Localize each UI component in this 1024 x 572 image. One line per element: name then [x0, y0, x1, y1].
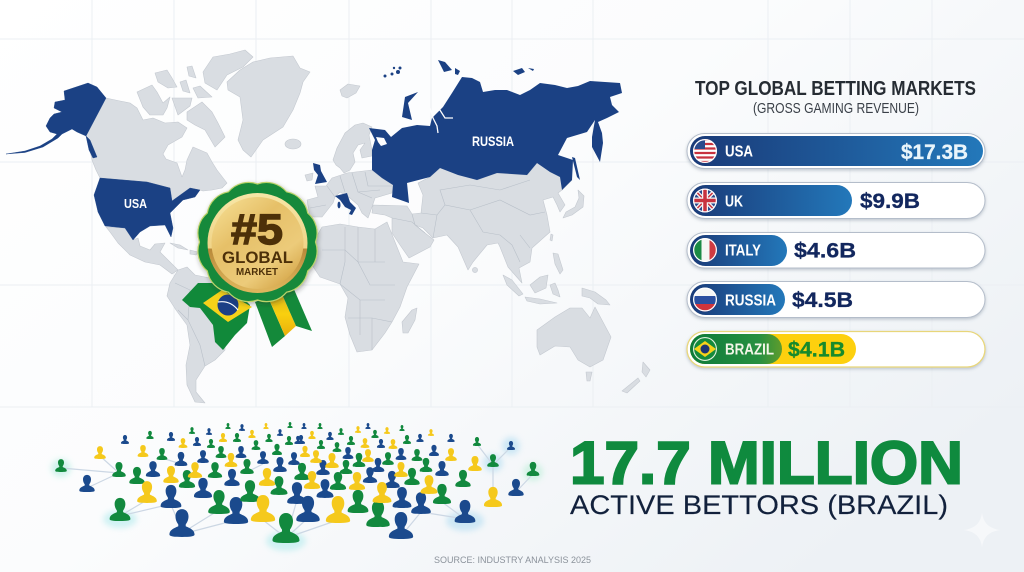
- flag globe: [218, 294, 238, 316]
- bar: Brazil: $4.1B: [788, 338, 845, 362]
- bar: UK: UK: [725, 194, 743, 210]
- bar: Russia: RUSSIA: [725, 292, 776, 310]
- highlighted: Russia: [369, 60, 622, 203]
- bar: USA: [687, 134, 985, 168]
- connection lines: [61, 444, 533, 538]
- people: yellow: [94, 423, 502, 523]
- sparkle: [964, 513, 1000, 547]
- country borders: [175, 172, 545, 366]
- flag: USA: [693, 139, 717, 163]
- Russian coastal inlets: [430, 107, 453, 133]
- badge: #5 global market: [198, 182, 317, 347]
- flag diamond: [203, 290, 252, 322]
- badge text: MARKET: [236, 267, 278, 278]
- grey land masses: [86, 50, 650, 403]
- bar: Italy: ITALY: [725, 242, 761, 260]
- highlighted: USA: [6, 83, 200, 240]
- flag: Brazil: [693, 337, 717, 361]
- panel: top global betting markets: [687, 77, 985, 367]
- Brazil with flag: [182, 283, 252, 350]
- flag: Russia: [693, 288, 717, 312]
- rosette: [198, 182, 317, 302]
- stat label: active bettors: ACTIVE BETTORS (BRAZIL): [570, 490, 948, 520]
- badge text: GLOBAL: [222, 248, 293, 267]
- people: green: [55, 422, 539, 543]
- big stat: 17.7 million: 17.7 MILLION: [570, 430, 963, 496]
- bar: UK: [687, 182, 985, 218]
- world map: [6, 50, 650, 403]
- flag: Italy: [693, 238, 717, 262]
- bar: Brazil: [687, 332, 985, 367]
- bar: Brazil: BRAZIL: [725, 342, 774, 358]
- heading: TOP GLOBAL BETTING MARKETS: [695, 77, 976, 100]
- badge text: #5: [231, 206, 283, 254]
- bar: USA: USA: [725, 144, 753, 160]
- label: Russia: RUSSIA: [472, 133, 514, 149]
- bar: USA: $17.3B: [901, 141, 968, 164]
- bar: Russia: [687, 282, 985, 318]
- source: SOURCE: INDUSTRY ANALYSIS 2025: [434, 555, 591, 566]
- people: blue: [79, 423, 524, 539]
- badge text: [222, 206, 293, 278]
- people network: [51, 422, 543, 551]
- flag: UK: [693, 188, 717, 212]
- ribbon: [255, 287, 312, 347]
- node glows: [51, 437, 543, 551]
- highlighted: UK: [313, 163, 327, 184]
- subheading: (GROSS GAMING REVENUE): [753, 100, 919, 117]
- label: USA: USA: [124, 196, 148, 211]
- bar: Italy: [687, 232, 985, 268]
- White Sea inlet: [376, 137, 387, 146]
- bar: Italy: $4.6B: [794, 240, 856, 262]
- bar: UK: $9.9B: [860, 190, 920, 213]
- highlighted: Italy: [335, 193, 356, 215]
- bar: Russia: $4.5B: [792, 289, 853, 312]
